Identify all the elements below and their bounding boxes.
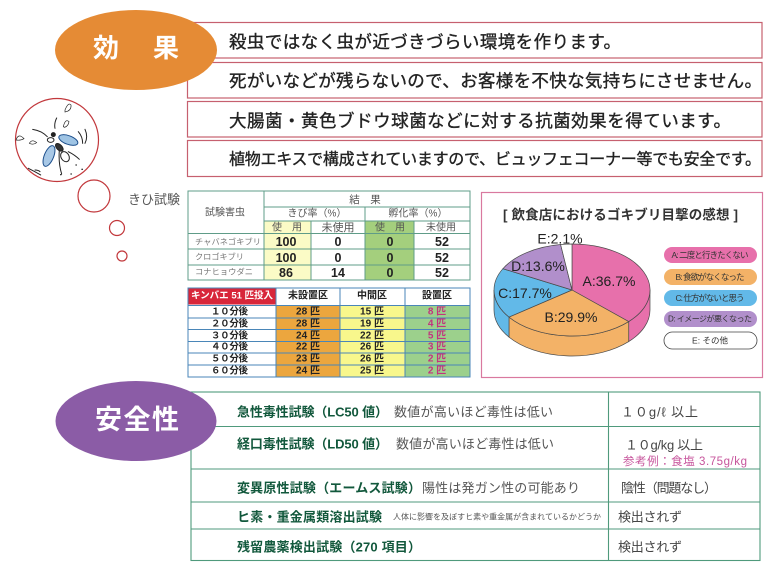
table: blowfly trial: 未設置区 [288, 288, 328, 302]
table: blowfly trial: 26 匹 [360, 340, 384, 352]
row: mutagenicity [237, 480, 717, 496]
legend: C: 仕方がないと思う [676, 293, 744, 303]
table: test results: 0 [335, 251, 342, 265]
row: pesticide residue [237, 540, 682, 554]
effect box 3: 大腸菌・黄色ブドウ球菌などに対する抗菌効果を得ています。 [229, 111, 731, 131]
row: acute toxicity: 急性毒性試験（LC50 値） [237, 404, 388, 420]
table: test results: 試験害虫 [205, 206, 245, 218]
row: heavy metals: 人体に影響を及ぼすヒ素や重金属が含まれているかどうか [393, 512, 601, 522]
table: blowfly trial: 26 匹 [360, 352, 384, 364]
row: oral toxicity: 経口毒性試験（LD50 値） [237, 436, 388, 452]
table: test results: コナヒョウダニ [195, 266, 253, 276]
legend: A: 二度と行きたくない [672, 250, 748, 260]
panel: effects list [188, 22, 762, 176]
table: blowfly trial: １０分後 [211, 306, 248, 318]
row: mutagenicity: 陽性は発ガン性の可能あり [422, 480, 580, 496]
table: test results: 未使用 [322, 221, 354, 234]
table: test results: 52 [435, 266, 449, 280]
row: oral toxicity: 参考例：食塩 3.75g/kg [623, 454, 747, 468]
table: test results: 孵化率（%） [389, 206, 447, 220]
row: acute toxicity: 数値が高いほど毒性は低い [394, 404, 553, 420]
table: blowfly trial: 24 匹 [296, 330, 320, 342]
effect box 4: 植物エキスで構成されていますので、ビュッフェコーナー等でも安全です。 [229, 150, 761, 168]
panel: pie chart [482, 192, 762, 378]
legend: B: 食欲がなくなった [676, 272, 744, 282]
table: blowfly trial: 22 匹 [360, 330, 384, 342]
table: test results: 未使用 [426, 220, 456, 234]
table: blowfly trial: 22 匹 [296, 340, 320, 352]
table: blowfly trial: 3 匹 [428, 340, 446, 352]
table: blowfly trial: ６０分後 [211, 364, 248, 376]
row: acute toxicity: １０g/ℓ 以上 [621, 404, 698, 420]
table: blowfly trial: 2 匹 [428, 364, 446, 376]
table: blowfly trial: ５０分後 [211, 352, 248, 364]
effect box 3 [188, 102, 762, 137]
highlighted cells [264, 221, 414, 280]
table: test results: 使 用 [272, 220, 302, 234]
heading: effects [55, 10, 217, 90]
table: blowfly trial: ２０分後 [211, 318, 248, 330]
table: test results: 52 [435, 251, 449, 265]
table: blowfly trial: ３０分後 [211, 330, 248, 342]
row: mutagenicity: 陰性（問題なし） [621, 480, 717, 496]
table: test results: 0 [387, 235, 394, 249]
chart title: [ 飲食店におけるゴキブリ目撃の感想 ] [503, 206, 738, 222]
legend: D: イメージが悪くなった [668, 314, 752, 324]
table: test results: 0 [335, 235, 342, 249]
table: test results: チャバネゴキブリ [195, 236, 261, 246]
table: test results: きび率（%） [288, 208, 346, 220]
row: heavy metals [237, 510, 682, 524]
table: blowfly trial: キンバエ 51 匹投入 [191, 290, 274, 302]
legend [664, 247, 757, 349]
table: blowfly trial [188, 288, 470, 377]
table: blowfly trial: 5 匹 [428, 330, 446, 342]
row: heavy metals: 検出されず [618, 510, 682, 524]
row: oral toxicity: 数値が高いほど毒性は低い [396, 436, 554, 452]
table: test results: 0 [387, 251, 394, 265]
table: test results: 86 [279, 266, 293, 280]
table: blowfly trial: 28 匹 [296, 306, 320, 318]
table: test results: 14 [331, 266, 345, 280]
legend: E: その他 [692, 336, 728, 346]
effect box 1: 殺虫ではなく虫が近づきづらい環境を作ります。 [229, 32, 621, 52]
heading: effects: 効 果 [93, 33, 179, 63]
table: test results: 100 [276, 235, 296, 249]
row: mutagenicity: 変異原性試験（エームス試験） [237, 480, 421, 496]
pie chart [494, 244, 650, 356]
row: heavy metals: ヒ素・重金属類溶出試験 [237, 510, 382, 524]
table: blowfly trial: 15 匹 [360, 306, 384, 318]
table: blowfly trial: 23 匹 [296, 352, 320, 364]
row: pesticide residue: 残留農薬検出試験（270 項目） [237, 540, 421, 554]
table: blowfly trial: 28 匹 [296, 318, 320, 330]
table: test results: 使 用 [375, 220, 405, 234]
table: test results [188, 191, 470, 280]
table: blowfly trial: 設置区 [422, 290, 452, 302]
label: kibi test: きひ試験 [128, 192, 180, 207]
table: blowfly trial: 2 匹 [428, 352, 446, 364]
effect box 2 [188, 62, 762, 98]
row: oral toxicity [237, 436, 747, 468]
panel: pie chart: B:29.9% [545, 309, 597, 325]
table: test results: 52 [435, 235, 449, 249]
table: test results: 100 [276, 251, 296, 265]
panel: pie chart: A:36.7% [583, 273, 635, 289]
panel: pie chart: C:17.7% [498, 285, 552, 301]
row: acute toxicity [237, 404, 698, 420]
row: pesticide residue: 検出されず [618, 540, 682, 554]
table: test results: クロゴキブリ [195, 252, 244, 262]
table: blowfly trial: 19 匹 [360, 318, 384, 330]
table: test results: 0 [387, 266, 394, 280]
heading: safety: 安全性 [95, 405, 179, 435]
heading: safety [56, 381, 216, 461]
table: blowfly trial: 4 匹 [428, 318, 446, 330]
table: blowfly trial: ４０分後 [211, 340, 248, 352]
effect box 2: 死がいなどが残らないので、お客様を不快な気持ちにさせません。 [229, 71, 762, 91]
effect box 4 [188, 140, 762, 176]
table: test results: 結 果 [349, 193, 381, 206]
effect box 1 [188, 22, 762, 58]
table: blowfly trial: 25 匹 [360, 364, 384, 376]
panel: pie chart: E:2.1% [537, 230, 583, 246]
panel: pie chart: D:13.6% [511, 258, 565, 274]
icon: mosquito in thought bubbles [16, 98, 127, 261]
row: oral toxicity: １０g/kg 以上 [625, 438, 703, 452]
table: blowfly trial: 中間区 [357, 288, 387, 302]
table: blowfly trial: 8 匹 [428, 306, 446, 318]
table: blowfly trial: 24 匹 [296, 364, 320, 376]
table: safety tests [191, 392, 760, 560]
